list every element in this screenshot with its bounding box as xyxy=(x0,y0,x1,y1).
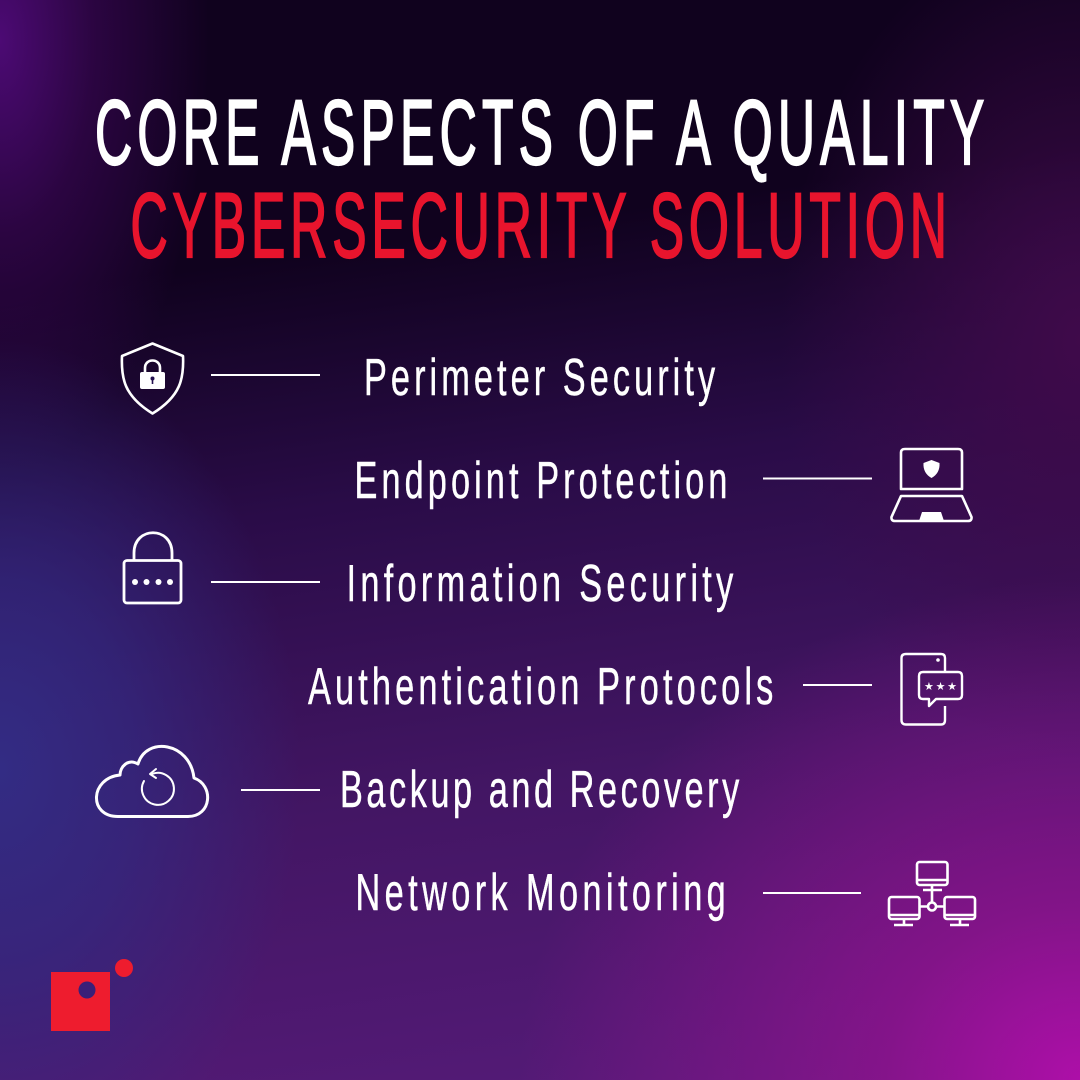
icon: network of computers xyxy=(889,862,975,925)
label: Information Security xyxy=(346,555,733,613)
label: Network Monitoring xyxy=(356,864,726,922)
connector line xyxy=(211,374,320,376)
icon: phone with password bubble xyxy=(902,654,962,724)
label: Authentication Protocols xyxy=(308,658,773,716)
connector line xyxy=(241,789,320,791)
item: network monitoring xyxy=(356,862,975,925)
logo xyxy=(51,959,133,1031)
logo outer dot xyxy=(115,959,133,977)
icon: padlock with password dots xyxy=(124,533,181,603)
item: endpoint protection xyxy=(354,449,972,521)
icon: phone with password bubble: ★★★ xyxy=(924,680,957,693)
item: authentication protocols xyxy=(308,654,962,724)
connector line xyxy=(763,892,861,894)
icon: shield with padlock xyxy=(122,344,183,414)
title xyxy=(95,81,984,277)
icon: cloud with restore arrow xyxy=(96,746,208,816)
connector line xyxy=(803,684,872,686)
connector line xyxy=(763,478,872,480)
logo inner dot xyxy=(78,982,96,998)
title line 2: CYBERSECURITY SOLUTION xyxy=(130,174,947,277)
label: Backup and Recovery xyxy=(340,761,739,819)
icon: laptop with shield xyxy=(891,449,972,521)
item: backup and recovery xyxy=(96,746,739,819)
item: information security xyxy=(124,533,733,613)
item: perimeter security xyxy=(122,344,715,414)
label: Endpoint Protection xyxy=(354,452,727,510)
title line 1: CORE ASPECTS OF A QUALITY xyxy=(95,81,984,184)
label: Perimeter Security xyxy=(364,349,715,407)
connector line xyxy=(211,581,320,583)
logo square xyxy=(51,972,110,1031)
